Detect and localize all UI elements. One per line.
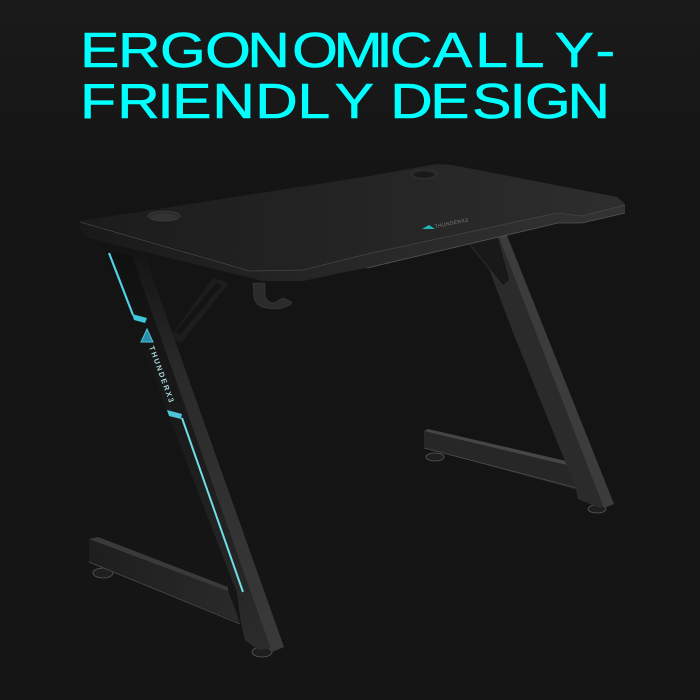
left upright cyan light strip lower <box>167 410 243 592</box>
right bracket <box>467 236 510 286</box>
title line 1: ERGONOMICALLY- <box>80 24 615 78</box>
desk top <box>80 164 625 281</box>
headset hook <box>253 283 292 309</box>
brand triangle logo <box>141 329 153 342</box>
lower edge highlight right <box>367 213 625 268</box>
surface edge highlight <box>80 205 625 271</box>
title <box>80 24 615 129</box>
desk front edge <box>80 204 625 281</box>
right leg <box>424 233 614 513</box>
desk surface <box>80 164 625 270</box>
left upright front face <box>105 250 272 650</box>
right cable grommet <box>411 170 437 178</box>
title line 2: FRIENDLY DESIGN <box>80 75 610 129</box>
right foot bar <box>424 429 578 490</box>
left cable grommet <box>148 211 180 221</box>
right upright <box>478 233 614 508</box>
desk brand wordmark: THUNDERX3 <box>434 218 469 230</box>
left upright cyan light strip upper <box>109 253 147 323</box>
left upright side face <box>132 256 284 652</box>
left foot glide pads <box>93 568 272 657</box>
right foot glide pads <box>426 453 606 513</box>
left leg <box>89 250 284 657</box>
brand wordmark on leg: THUNDERX3 <box>147 345 176 405</box>
left foot bar <box>89 537 240 624</box>
left support strut <box>170 278 229 343</box>
desk logo mark <box>422 225 435 229</box>
